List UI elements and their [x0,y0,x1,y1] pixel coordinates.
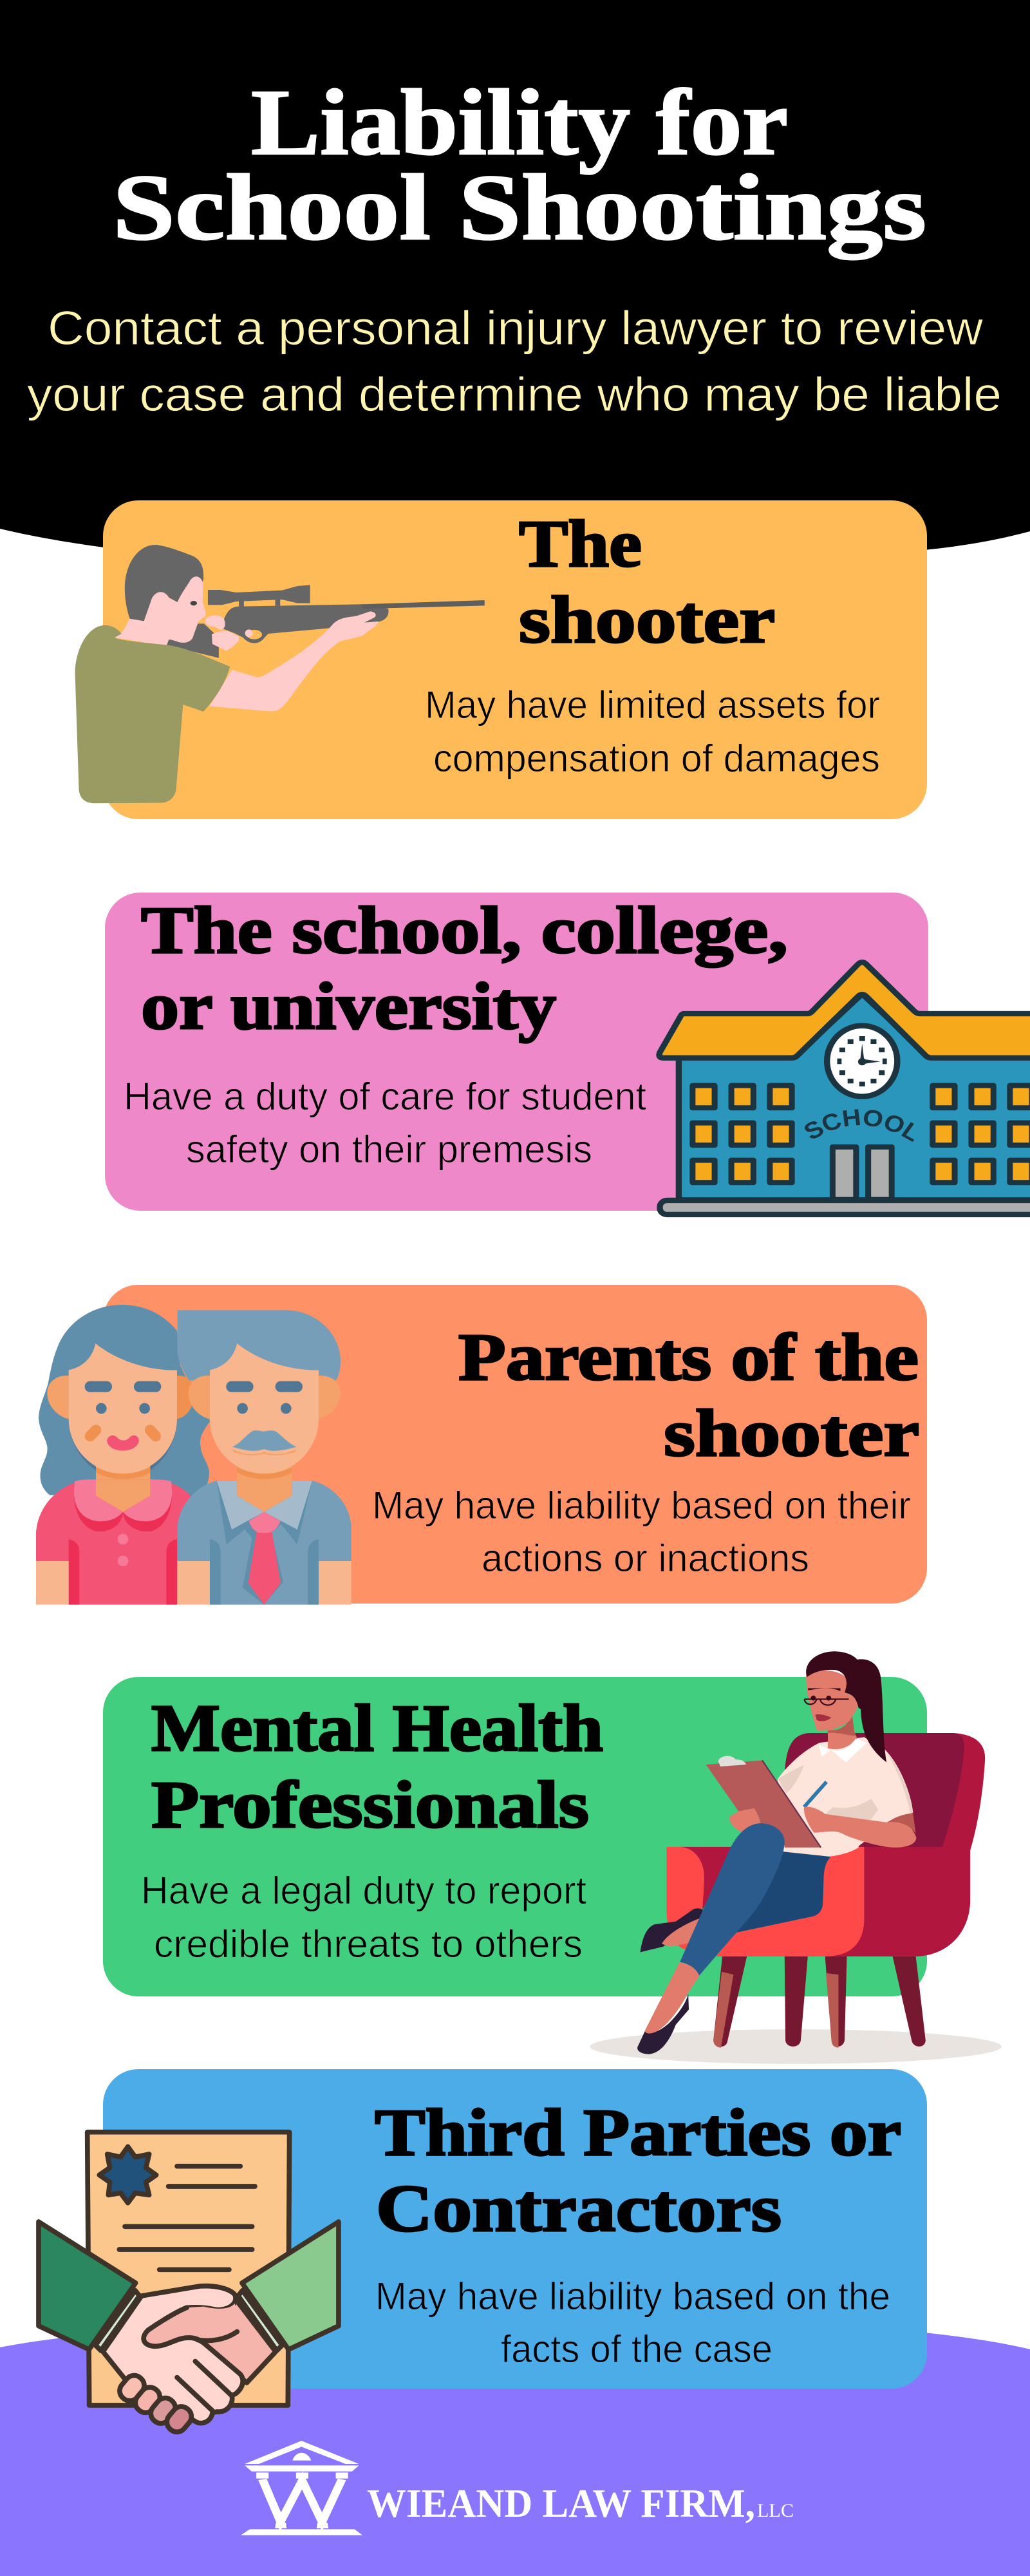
panel: third parties or contractors [39,2069,927,2436]
header background [0,0,1030,560]
heading [151,1691,603,1842]
panel: mental health professionals [103,1651,1002,2064]
doors [832,1147,892,1200]
panel: the school [105,893,1030,1217]
logo: Wieand Law Firm [241,2441,794,2535]
icon: courthouse W emblem [241,2441,362,2535]
body text: facts of the case [501,2327,772,2371]
body text [141,1869,586,1965]
icon: therapist in armchair [590,1651,1002,2064]
heading: Mental Health [151,1691,603,1765]
body text: credible threats to others [154,1922,583,1965]
body text: compensation of damages [433,737,880,780]
icon: mother and father [36,1305,351,1605]
body text: May have liability based on their [372,1484,911,1527]
heading [141,893,788,1043]
heading: The [519,507,642,581]
heading: shooter [519,583,775,657]
heading: Professionals [151,1768,589,1842]
panel: parents [36,1285,927,1605]
subtitle: your case and determine who may be liable [27,368,1002,421]
body text: actions or inactions [482,1537,809,1580]
icon: school building: SCHOOL [805,1109,914,1142]
body text: May have limited assets for [425,683,880,726]
sign text [811,1125,914,1143]
card background [103,1285,927,1604]
wordmark: LLC [757,2500,794,2521]
footer background [0,2316,1030,2576]
chair [666,1733,985,2048]
body text: Have a legal duty to report [141,1869,586,1912]
man [178,1310,351,1605]
icon: man aiming a rifle [75,545,485,803]
windows [693,1086,1030,1182]
body text: May have liability based on the [375,2275,890,2318]
heading [519,507,775,657]
card background [103,2069,927,2389]
heading: Parents of the [458,1320,919,1394]
sleeves [39,2222,339,2351]
base [660,1200,1030,1215]
body text [124,1075,646,1171]
glasses [805,1699,849,1705]
heading: The school, college, [141,893,788,967]
clock [827,1026,897,1097]
hands [103,2286,276,2436]
title: Liability for [251,70,788,175]
heading: Contractors [376,2172,782,2246]
title: School Shootings [113,155,926,260]
woman [36,1305,211,1605]
woman [637,1651,916,2054]
heading: or university [141,969,556,1043]
icon: handshake over contract [39,2132,339,2436]
card background [105,893,928,1211]
subtitle: Contact a personal injury lawyer to review [48,301,984,355]
heading [458,1320,919,1470]
card background [103,1677,927,1996]
subtitle [27,301,1002,421]
icon: school building [656,960,1030,1217]
body text: Have a duty of care for student [124,1075,646,1118]
heading: shooter [664,1396,919,1470]
title [113,70,926,260]
contract [88,2132,290,2405]
body text [375,2275,890,2371]
card background [103,500,927,819]
body text [372,1484,911,1580]
panel: the shooter [75,500,927,819]
wordmark: WIEAND LAW FIRM, [367,2482,755,2526]
body text: safety on their premesis [186,1128,592,1171]
heading: Third Parties or [375,2096,901,2170]
heading [375,2096,901,2246]
body text [425,683,880,780]
